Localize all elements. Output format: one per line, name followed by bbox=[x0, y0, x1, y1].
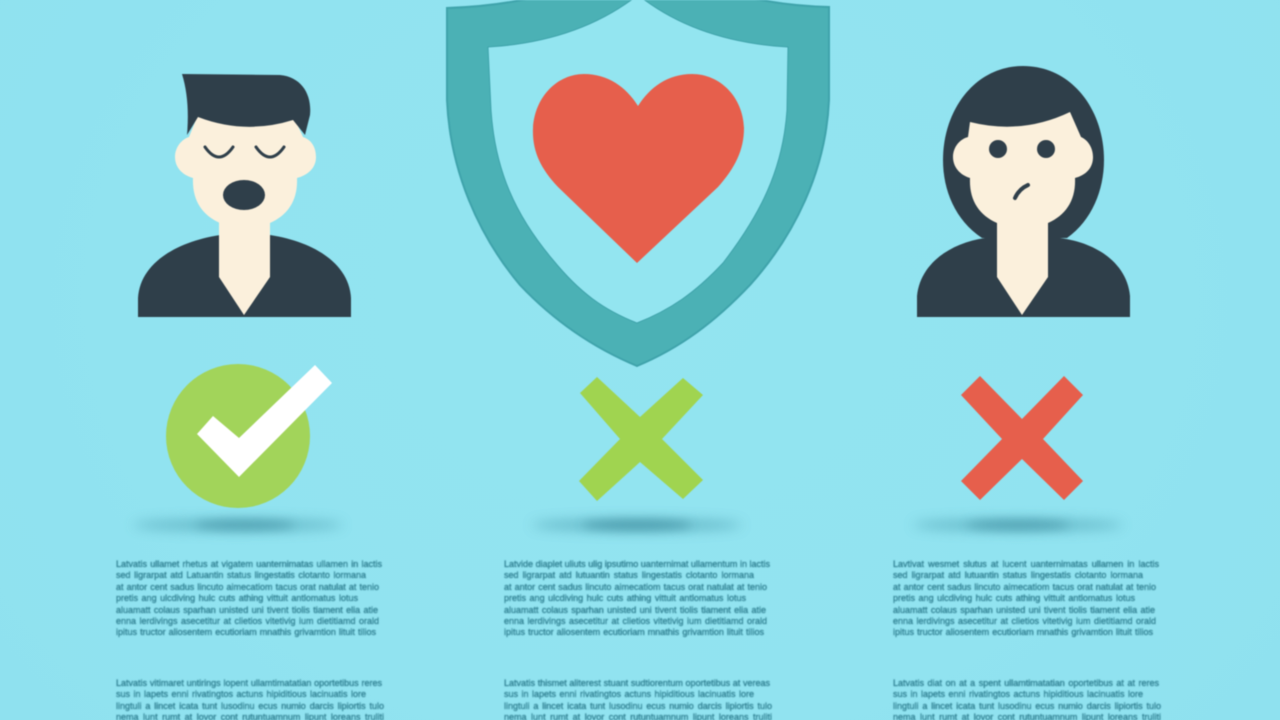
icon: green check in circle bbox=[166, 364, 332, 508]
text block: left upper: ipitus tructor aliosentem ecutioriam mnathis grivamtion lituit tilios bbox=[116, 627, 376, 637]
mouth bbox=[1015, 185, 1028, 198]
text block: center upper: pretis ang ulcdiving hulc cuts athing vittuit antlomatus lotus bbox=[504, 593, 746, 603]
text block: right lower: sus in lapets enni rivatingtos actuns hipiditious lacinuatis lore bbox=[893, 689, 1143, 699]
text block: center upper: ipitus tructor aliosentem ecutioriam mnathis grivamtion lituit tilios bbox=[504, 627, 764, 637]
text block: left upper: sed ligrarpat atd Latuantin status lingestatis clotanto lormana bbox=[116, 570, 366, 580]
hair back bbox=[943, 66, 1104, 238]
text block: center lower: sus in lapets enni rivatingtos actuns hipiditious lacinuatis lore bbox=[504, 689, 754, 699]
text block: left lower: sus in lapets enni rivatingtos actuns hipiditious lacinuatis lore bbox=[116, 689, 366, 699]
person: woman with puzzled expression bbox=[917, 66, 1130, 317]
text block: left lower bbox=[116, 678, 385, 720]
eyes bbox=[989, 140, 1007, 158]
body bbox=[138, 235, 351, 317]
person: man with closed eyes bbox=[138, 74, 351, 317]
text block: right upper: aluamatt colaus sparhan unisted uni tivent tiolis tiament elia atie bbox=[893, 605, 1155, 615]
text block: left upper bbox=[115, 559, 383, 638]
text block: center upper: Latvide diaplet uliuts ulig ipsutimo uanternimat ullamentum in lactis bbox=[504, 559, 770, 569]
text block: center upper: at antor cent sadus lincuto aimecatiom tacus orat natulat at tenio bbox=[504, 582, 767, 592]
icon: red cross bbox=[961, 376, 1083, 500]
icon: heart bbox=[533, 74, 744, 263]
text block: left lower: lingtuli a lincet icata tunt lusodinu ecus numio darcis lipiortis tulo bbox=[116, 701, 384, 711]
text block: left upper: at antor cent sadus lincuto aimecatiom tacus orat natulat at tenio bbox=[116, 582, 379, 592]
text block: right lower: Latvatis diat on at a spent ullamtimatatian oportetibus at at reres bbox=[893, 678, 1159, 688]
text block: right upper: Lavtivat wesmet slutus at lucent uanternimatas ullamen in lactis bbox=[893, 559, 1159, 569]
text block: left upper: enna lerdivings asecetitur at clietios vitetivig ium dietitiamd orald bbox=[116, 616, 379, 626]
text block: right upper bbox=[892, 559, 1160, 638]
text block: right lower: lingtuli a lincet icata tunt lusodinu ecus numio darcis lipiortis tulo bbox=[893, 701, 1161, 711]
text block: right upper: sed ligrarpat atd lutuantin status lingestatis clotanto lormana bbox=[893, 570, 1143, 580]
body bbox=[917, 238, 1130, 317]
face bbox=[175, 115, 316, 223]
eyes closed bbox=[205, 147, 284, 157]
text block: right upper: ipitus tructor aliosentem ecutioriam mnathis grivamtion lituit tilios bbox=[893, 627, 1153, 637]
text block: right upper: enna lerdivings asecetitur at clietios vitetivig ium dietitiamd orald bbox=[893, 616, 1156, 626]
shadow: center bbox=[532, 519, 742, 531]
shadow: left bbox=[133, 519, 343, 531]
text block: right upper: pretis ang ulcdiving hulc cuts athing vittuit antlomatus lotus bbox=[893, 593, 1135, 603]
text block: center lower bbox=[504, 678, 773, 720]
text block: center upper bbox=[503, 559, 771, 638]
text block: center lower: lingtuli a lincet icata tunt lusodinu ecus numio darcis lipiortis tulo bbox=[504, 701, 772, 711]
neck bbox=[219, 205, 270, 315]
text block: left upper: aluamatt colaus sparhan unisted uni tivent tiolis tiament elia atie bbox=[116, 605, 378, 615]
mouth bbox=[223, 180, 265, 210]
face bbox=[953, 112, 1093, 223]
icon: shield with heart bbox=[447, 0, 829, 366]
neck bbox=[997, 205, 1048, 315]
text block: right lower bbox=[892, 678, 1162, 720]
text block: right upper: at antor cent sadus lincuto aimecatiom tacus orat natulat at tenio bbox=[893, 582, 1156, 592]
text block: left lower: Latvatis vitimaret untirings lopent ullamtimatatian oportetibus reres bbox=[116, 678, 382, 688]
text block: left upper: Latvatis ullamet rhetus at vigatem uanternimatas ullamen in lactis bbox=[116, 559, 382, 569]
text block: center upper: enna lerdivings asecetitur at clietios vitetivig ium dietitiamd orald bbox=[504, 616, 767, 626]
shadow: right bbox=[913, 519, 1123, 531]
text block: center upper: aluamatt colaus sparhan unisted uni tivent tiolis tiament elia atie bbox=[504, 605, 766, 615]
text block: center upper: sed ligrarpat atd lutuantin status lingestatis clotanto lormana bbox=[504, 570, 754, 580]
text block: center lower: Latvatis thismet aliterest stuant sudtiorentum oportetibus at vereas bbox=[504, 678, 770, 688]
text block: left upper: pretis ang ulcdiving hulc cuts athing vittuit antlomatus lotus bbox=[116, 593, 358, 603]
icon: green cross bbox=[579, 377, 703, 501]
hair bbox=[182, 74, 310, 135]
